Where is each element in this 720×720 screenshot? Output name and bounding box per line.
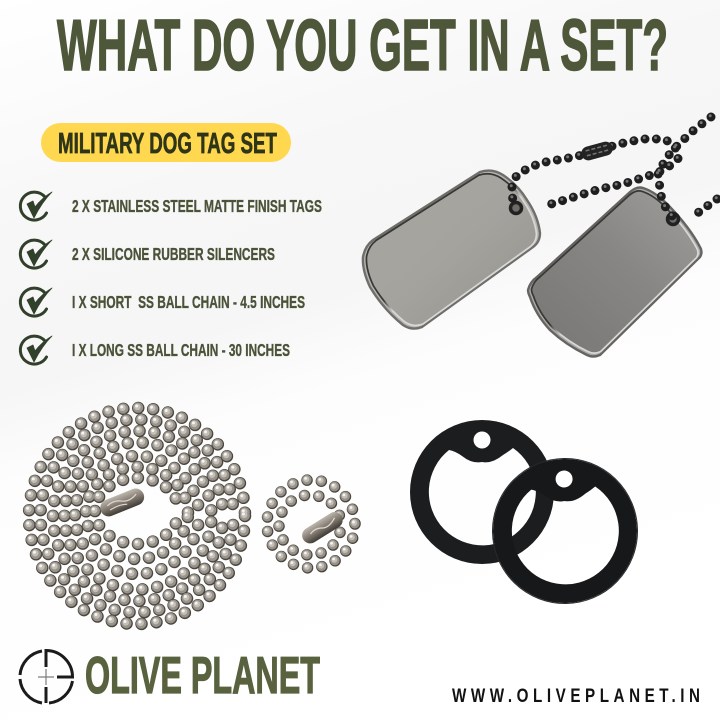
chain clasp: [580, 140, 614, 162]
tag eyelets: [510, 202, 678, 224]
item: long ball chain: I X LONG SS BALL CHAIN - 30 INCHES: [72, 340, 290, 360]
badge: military dog tag set: MILITARY DOG TAG SET: [58, 128, 277, 160]
website url: WWW.OLIVEPLANET.IN: [452, 684, 700, 706]
item: short ball chain: [20, 288, 305, 316]
right silencer: [491, 457, 639, 605]
item: silicone silencers: 2 X SILICONE RUBBER SILENCERS: [72, 244, 275, 264]
long chain clasp: [98, 486, 147, 519]
short chain clasp: [299, 509, 346, 546]
right tag: [528, 188, 702, 356]
item: stainless steel tags: 2 X STAINLESS STEEL MATTE FINISH TAGS: [72, 196, 322, 216]
left tag: [363, 171, 540, 329]
logo: olive planet: [20, 647, 320, 705]
item: stainless steel tags: [20, 192, 322, 220]
item: short ball chain: I X SHORT SS BALL CHAIN - 4.5 INCHES: [72, 292, 305, 312]
left silencer: [410, 420, 554, 564]
icon: crosshair: [20, 650, 72, 703]
wordmark: OLIVE PLANET: [85, 647, 320, 705]
item: silicone silencers: [20, 240, 275, 268]
image: rubber silencers: [410, 420, 639, 605]
item: long ball chain: [20, 336, 290, 364]
image: short ball chain: [266, 478, 355, 568]
dark ball chains: [511, 116, 717, 217]
checklist: [20, 192, 322, 364]
badge: military dog tag set: [41, 123, 291, 162]
image: long ball chain: [27, 406, 245, 624]
image: dog tags with chains: [363, 116, 717, 356]
